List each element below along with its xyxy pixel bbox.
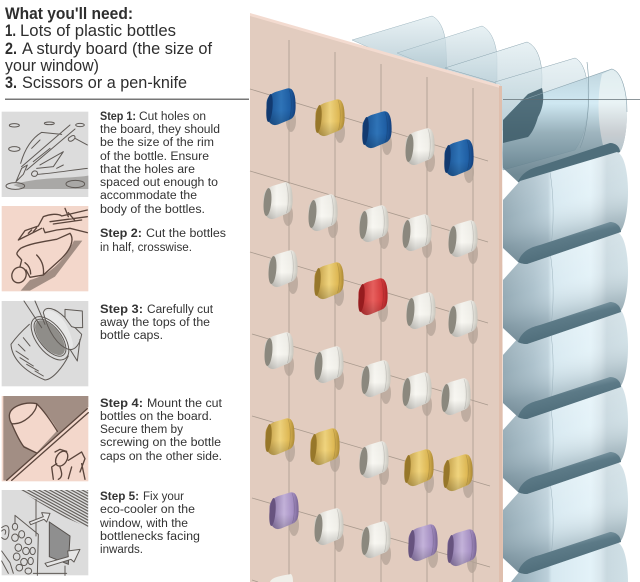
back row of transparent bottles [352, 16, 588, 170]
text block: step 1: spaced out enough to [100, 177, 218, 189]
text block: step 5: bottlenecks facing [100, 531, 200, 543]
materials list: Scissors or a pen-knife [22, 74, 187, 92]
heading: What you'll need: [5, 5, 133, 23]
text block: step 3: Step 3: [100, 304, 143, 316]
text block: step 5: window, with the [99, 518, 188, 530]
text block: step 4: bottles on the board. [100, 411, 212, 423]
panel: what you'll need [5, 5, 212, 92]
icon: step 2 cutting the bottle [2, 206, 88, 291]
front transparent bottle [503, 62, 627, 184]
icon: step 1 cutting holes [2, 112, 88, 197]
board [250, 14, 503, 582]
text block: step 4: Secure them by [100, 424, 183, 436]
cap row 1 [265, 88, 474, 183]
text block: step 5: Step 5: [100, 491, 139, 503]
text block: step 3 [100, 304, 214, 342]
text block: step 1: body of the bottles. [100, 204, 205, 216]
materials list: 1. [5, 22, 16, 40]
icon: step 3 cutting the cap [2, 301, 88, 386]
cap row 6 [268, 492, 477, 573]
text block: step 1: accommodate the [100, 190, 197, 202]
text block: step 2 [100, 228, 226, 254]
materials list: 2. [5, 40, 17, 58]
text block: step 5 [99, 491, 200, 556]
icon: step 4 mounting the bottle [2, 396, 88, 481]
text block: step 4: caps on the other side. [100, 451, 222, 463]
cap row 4 [263, 332, 471, 422]
cap row 2 [262, 182, 478, 264]
text block: step 1: Step 1: [100, 111, 136, 123]
text block: step 1: be the size of the rim [100, 137, 214, 149]
cap row 3 [267, 250, 478, 344]
text block: step 1 [100, 111, 220, 216]
text block: step 2: in half, crosswise. [100, 242, 192, 254]
text block: step 4: Step 4: [100, 398, 143, 410]
cap row 7 [270, 574, 293, 582]
text block: step 4: screwing on the bottle [100, 437, 221, 449]
text block: step 3: bottle caps. [100, 330, 163, 342]
text block: step 5: eco-cooler on the [100, 504, 195, 516]
text block: step 2: Cut the bottles [146, 228, 226, 240]
materials list: your window) [5, 57, 99, 75]
text block: step 5: inwards. [100, 544, 143, 556]
lower row of bottles [503, 152, 628, 582]
materials list: Lots of plastic bottles [20, 22, 176, 40]
text block: step 1: the board, they should [100, 124, 220, 136]
text block: step 5: Fix your [143, 491, 184, 503]
text block: step 1: Cut holes on [139, 111, 206, 123]
materials list [5, 22, 212, 92]
cap row 5 [264, 418, 473, 498]
text block: step 2: Step 2: [100, 228, 142, 240]
text block: step 3: away the tops of the [100, 317, 210, 329]
panel: board with bottle caps [250, 13, 503, 582]
materials list: A sturdy board (the size of [22, 40, 212, 58]
icon: step 5 fixing to the window [1, 490, 88, 576]
text block: step 3: Carefully cut [147, 304, 214, 316]
text block: step 1: of the bottle. Ensure [100, 151, 209, 163]
text block: step 1: that the holes are [100, 164, 195, 176]
materials list: 3. [5, 74, 17, 92]
text block: step 4 [100, 398, 223, 463]
text block: step 4: Mount the cut [147, 398, 223, 410]
